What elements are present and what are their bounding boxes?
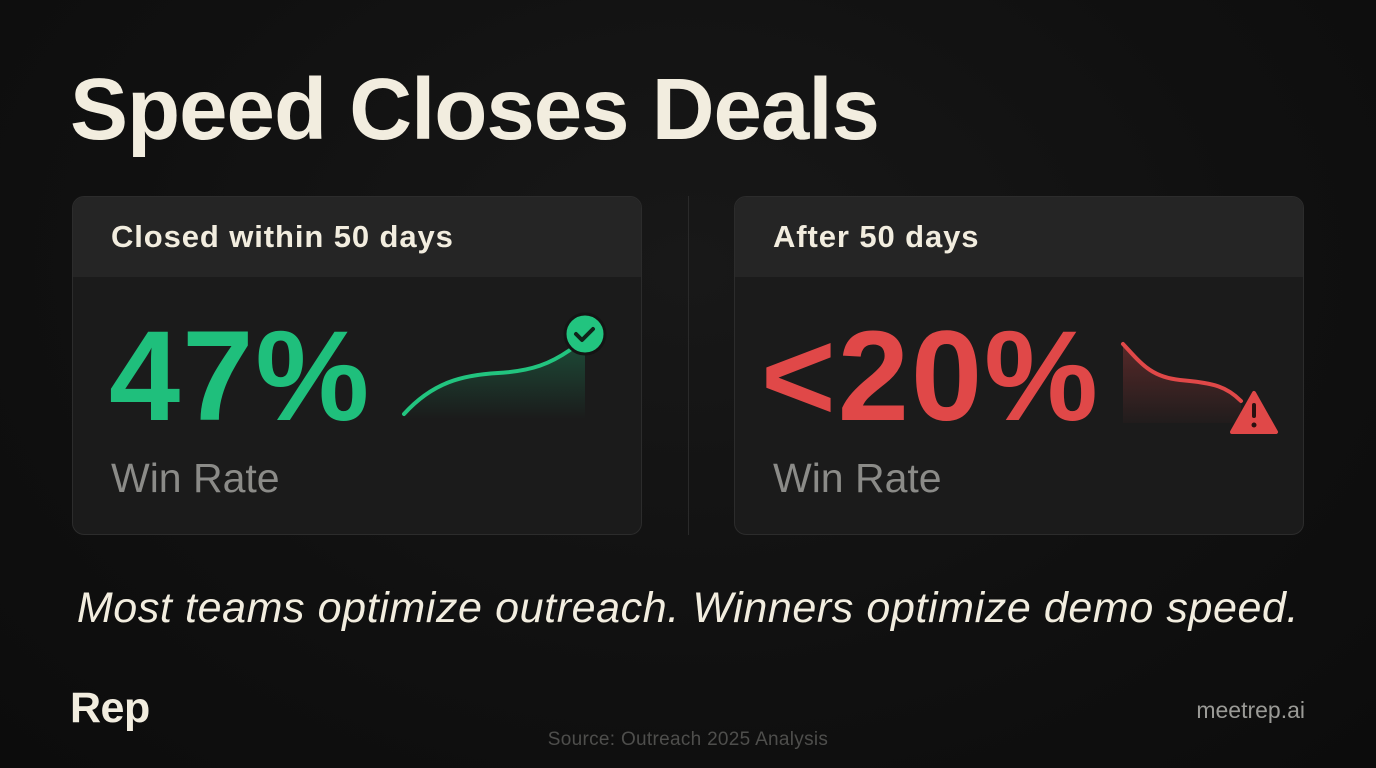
panel: closed within 50 days: [72, 196, 642, 535]
panel header: [73, 197, 641, 277]
panel header: After 50 days: [773, 219, 979, 254]
tagline: Most teams optimize outreach. Winners optimize demo speed.: [77, 584, 1299, 632]
source: Source: Outreach 2025 Analysis: [548, 729, 828, 750]
label: win rate: Win Rate: [111, 455, 280, 501]
logo: Rep: Rep: [70, 684, 150, 732]
panel header: [735, 197, 1303, 277]
label: win rate: Win Rate: [773, 455, 942, 501]
divider: [688, 196, 689, 535]
stat: 47%: 47%: [109, 305, 371, 448]
panel header: Closed within 50 days: [111, 219, 454, 254]
title: Speed Closes Deals: [70, 61, 879, 158]
website: meetrep.ai: [1196, 697, 1305, 723]
stat: <20%: <20%: [761, 305, 1100, 448]
panel: after 50 days: [734, 196, 1304, 535]
chart: falling curve with warning: [1120, 342, 1278, 434]
chart: rising curve with check: [402, 316, 604, 416]
